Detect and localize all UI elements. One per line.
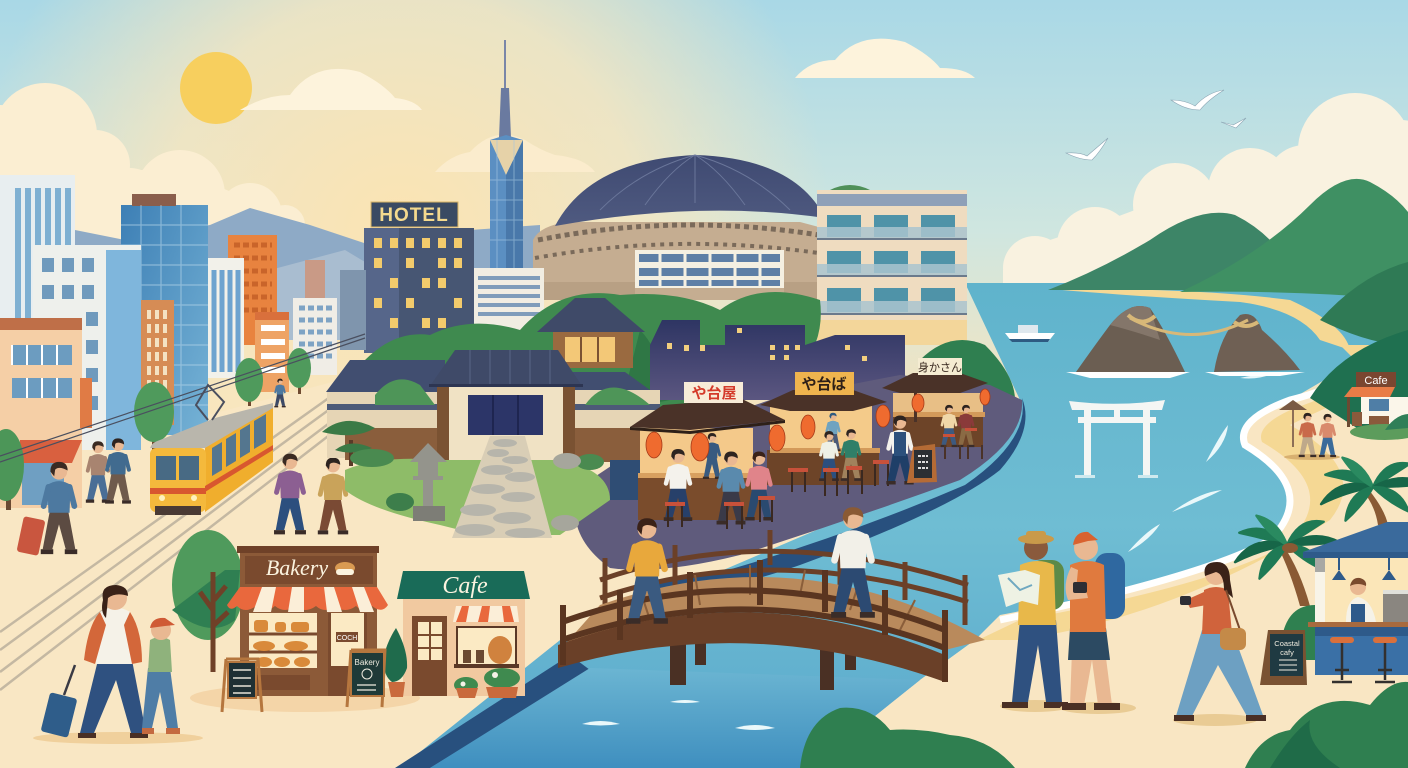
menu chalkboard [222, 659, 262, 712]
tram [150, 385, 273, 515]
pine and shrubs [322, 421, 604, 531]
yatai stall 1 [630, 382, 785, 529]
tree beside bakery [172, 530, 244, 672]
trees behind wall [375, 379, 650, 405]
yatai stall 2 [760, 372, 889, 496]
distant mountains [75, 208, 540, 340]
stone lantern [410, 443, 447, 521]
coastal cafe chalkboard: cafy [1280, 648, 1294, 657]
water ripples [582, 700, 775, 730]
garden lawn [345, 459, 610, 535]
main gate [429, 350, 583, 460]
bridge deck [560, 577, 985, 650]
white low building [474, 268, 544, 330]
blue glass tower [121, 194, 208, 435]
seaside apartment [817, 185, 967, 345]
yatai stall 3: 身かさん [918, 360, 962, 374]
garden walls [327, 390, 660, 462]
coastal cafe far: Cafe [1364, 375, 1388, 387]
paper lanterns [646, 389, 990, 461]
bakery shop: COCH [337, 635, 357, 642]
hotel: HOTEL [379, 205, 449, 226]
clouds [0, 39, 1408, 300]
stone path [452, 436, 552, 538]
bakery shop: Bakery [266, 555, 328, 580]
mid city buildings [208, 235, 366, 392]
street trees [134, 348, 311, 452]
blue fence [610, 460, 640, 500]
beach bar [1280, 522, 1408, 682]
night town backdrop [650, 320, 905, 400]
woman with camera [1173, 562, 1266, 726]
bridge piers [670, 635, 856, 690]
white tower with blue windows [33, 245, 141, 450]
beach sand [810, 289, 1408, 768]
coastal cafe chalkboard [1260, 630, 1307, 685]
green hills behind garden [365, 292, 1015, 420]
hotel [364, 202, 474, 353]
night district promenade [575, 375, 1022, 570]
back railing [600, 530, 968, 625]
fences [345, 428, 660, 462]
wedded rocks with rope [1066, 306, 1305, 378]
cafe shop: Cafe [442, 573, 488, 599]
left edge tree [0, 429, 24, 510]
torii gate [1069, 400, 1165, 478]
sky background [0, 0, 1408, 420]
tram tracks [0, 390, 345, 690]
gulls [1066, 90, 1246, 160]
night chalkboard [907, 444, 937, 483]
canal stone wall [395, 398, 1026, 768]
front railing [562, 560, 945, 682]
topiary [384, 628, 407, 697]
upper pavilion [537, 298, 645, 368]
canal lower water [430, 668, 920, 768]
cafe shop [397, 571, 530, 696]
bridge walkers [626, 507, 875, 624]
bakery shop [172, 530, 420, 712]
umbrella and beach couple [1279, 400, 1340, 460]
overhead wire [0, 334, 365, 462]
wooden bridge [558, 530, 985, 690]
corner shop building [0, 318, 92, 508]
right green mountains [1048, 179, 1408, 345]
coastal cafe chalkboard: Coastal [1274, 639, 1300, 648]
left ground [0, 380, 600, 768]
yatai stall 3 [882, 358, 988, 459]
waiter [886, 415, 914, 485]
sea highlights [1128, 374, 1272, 552]
palm tree near beach bar [1321, 458, 1408, 525]
tourist with map [998, 531, 1070, 712]
dome stadium [533, 155, 830, 300]
yatai stall 2: や台ば [801, 375, 847, 393]
palm tree left [1235, 516, 1339, 606]
bakery chalkboard: Bakery [355, 658, 379, 667]
orange side building [141, 300, 174, 425]
bakery chalkboard [347, 650, 385, 707]
foreground bushes [800, 682, 1408, 768]
sun [180, 52, 252, 124]
arch underside [558, 612, 945, 682]
mother and child with suitcase [33, 585, 203, 744]
yatai stall 1: や台屋 [691, 384, 737, 402]
boat [1005, 325, 1055, 342]
side roofs [326, 360, 650, 392]
sea [400, 283, 1408, 768]
Japanese garden complex [326, 298, 660, 462]
pale blue tower [0, 175, 75, 325]
coastal cafe far [1310, 330, 1408, 440]
planters [454, 668, 520, 698]
street pedestrians [16, 379, 348, 556]
skyscraper tower [490, 40, 523, 268]
tourist with backpack [1060, 532, 1136, 714]
